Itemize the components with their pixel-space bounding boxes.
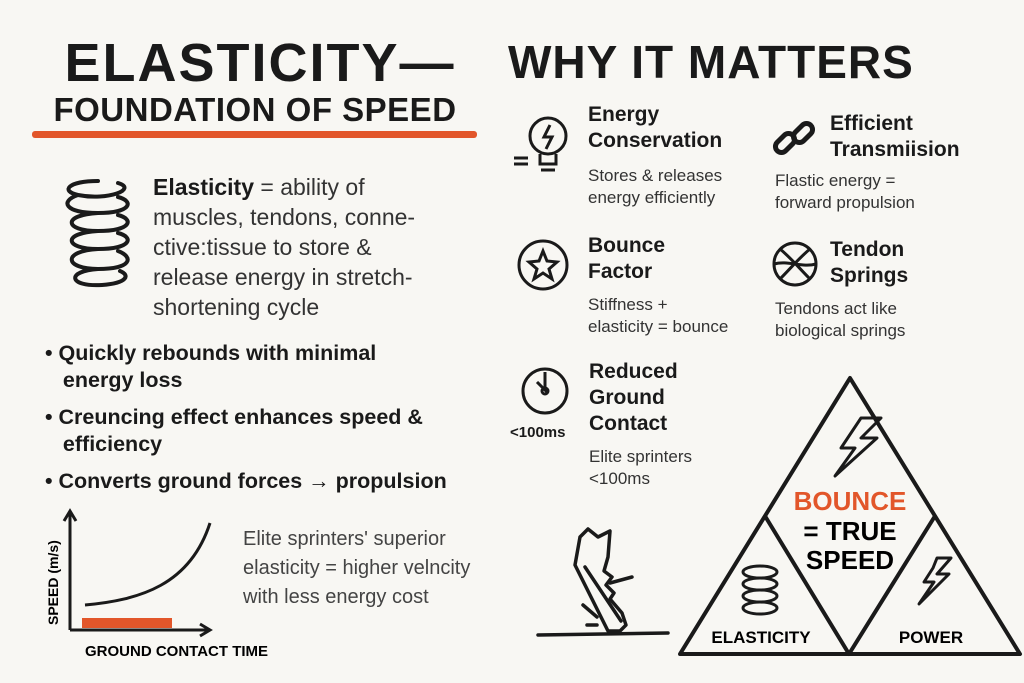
item: bounce factor: Bounce: [588, 234, 665, 257]
definition text: Elasticity = ability of: [153, 174, 365, 200]
item: energy conservation: [514, 103, 722, 207]
definition text: muscles, tendons, conne-: [153, 204, 415, 230]
item: tendon springs: [772, 238, 908, 340]
triangle diagram: SPEED: [806, 545, 894, 575]
item: efficient transmission: forward propulsion: [775, 193, 915, 212]
item: energy conservation: Conservation: [588, 129, 722, 152]
item: efficient transmission: [772, 112, 960, 212]
bullet list: [45, 341, 447, 493]
chart caption: Elite sprinters' superior: [243, 528, 446, 550]
item: reduced ground contact: Contact: [589, 412, 667, 435]
icon: spring: [65, 179, 130, 288]
orange underline: [32, 131, 477, 138]
item: reduced ground contact: Elite sprinters: [589, 447, 692, 466]
icon: sprinter shoe: [536, 527, 670, 637]
definition text: shortening cycle: [153, 294, 319, 320]
triangle diagram: BOUNCE: [794, 486, 906, 516]
chart caption: [243, 528, 470, 608]
item: bounce factor: [518, 234, 728, 336]
item: energy conservation: Energy: [588, 103, 659, 126]
item: bounce factor: Stiffness +: [588, 295, 668, 314]
chart: speed vs ground contact time: SPEED (m/s): [45, 540, 61, 625]
chart caption: with less energy cost: [243, 586, 429, 608]
chart: speed vs ground contact time: [45, 508, 268, 660]
icon: ball: [772, 242, 818, 286]
definition text: ctive:tissue to store &: [153, 234, 372, 260]
item: bounce factor: elasticity = bounce: [588, 317, 728, 336]
triangle diagram: [678, 376, 1022, 656]
item: efficient transmission: Flastic energy =: [775, 171, 895, 190]
chart: speed vs ground contact time: GROUND CONTACT TIME: [85, 643, 268, 660]
triangle diagram: = TRUE: [803, 516, 897, 546]
chart caption: elasticity = higher velncity: [243, 557, 470, 579]
item: reduced ground contact: Reduced: [589, 360, 678, 383]
icon: clock: [522, 368, 568, 414]
item: tendon springs: Tendon: [830, 238, 904, 261]
triangle diagram: ELASTICITY: [711, 628, 811, 647]
item: reduced ground contact: [510, 360, 692, 488]
subtitle: FOUNDATION OF SPEED: [53, 91, 457, 128]
item: bounce factor: Factor: [588, 260, 652, 283]
bullet list: efficiency: [63, 432, 162, 456]
title: ELASTICITY—: [64, 33, 456, 93]
item: reduced ground contact: Ground: [589, 386, 665, 409]
icon: chain: [772, 121, 815, 155]
bullet list: • Creuncing effect enhances speed &: [45, 405, 423, 429]
item: reduced ground contact: <100ms: [589, 469, 650, 488]
item: energy conservation: energy efficiently: [588, 188, 715, 207]
triangle diagram: POWER: [899, 628, 963, 647]
item: tendon springs: Springs: [830, 264, 908, 287]
definition text: release energy in stretch-: [153, 264, 413, 290]
item: reduced ground contact: <100ms: [510, 424, 565, 441]
item: energy conservation: Stores & releases: [588, 166, 722, 185]
item: efficient transmission: Efficient: [830, 112, 913, 135]
item: tendon springs: biological springs: [775, 321, 905, 340]
item: tendon springs: Tendons act like: [775, 299, 897, 318]
icon: star circle: [518, 240, 568, 290]
bullet list: energy loss: [63, 368, 182, 392]
icon: bulb: [514, 116, 568, 172]
heading: why it matters: WHY IT MATTERS: [508, 36, 914, 88]
definition text: [153, 174, 415, 320]
bullet list: • Converts ground forces → propulsion: [45, 469, 447, 493]
bullet list: • Quickly rebounds with minimal: [45, 341, 376, 365]
item: efficient transmission: Transmiision: [830, 138, 960, 161]
